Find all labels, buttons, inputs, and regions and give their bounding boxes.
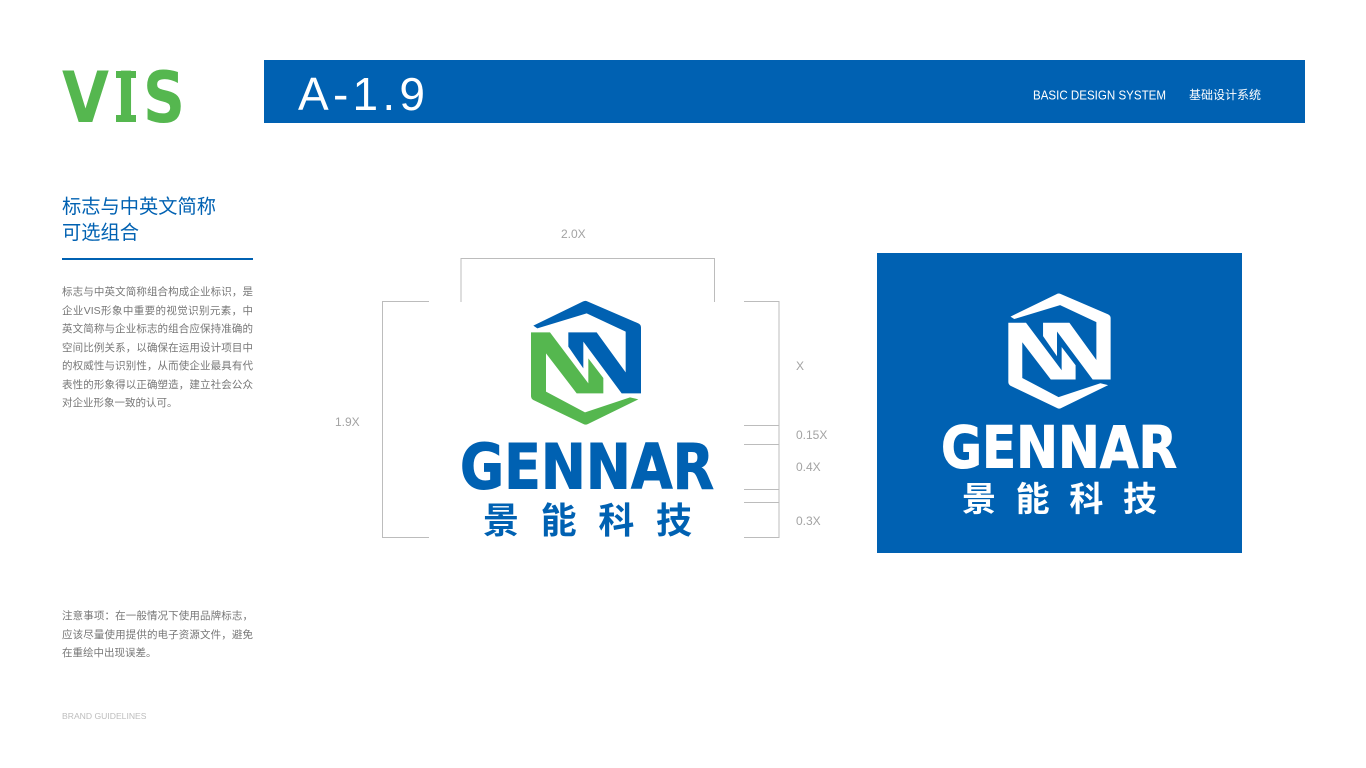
header label Chinese: 基础设计系统 xyxy=(1189,88,1261,102)
header bar xyxy=(264,60,1305,123)
dimension label 0.4X: 0.4X xyxy=(796,460,821,474)
white logo mark xyxy=(1008,294,1111,409)
description text: 表性的形象得以正确塑造，建立社会公众 xyxy=(62,378,253,390)
note text: 应该尽量使用提供的电子资源文件，避免 xyxy=(62,628,253,640)
description text: 的权威性与识别性，从而使企业最具有代 xyxy=(62,360,253,372)
header label English: BASIC DESIGN SYSTEM xyxy=(1033,88,1166,102)
dimension label X: X xyxy=(796,359,804,373)
description text: 对企业形象一致的认可。 xyxy=(62,397,178,409)
white wordmark: GENNAR xyxy=(941,414,1177,482)
dimension label 1.9X: 1.9X xyxy=(335,415,360,429)
white Chinese name: 景能科技 xyxy=(962,472,1157,521)
note text: 在重绘中出现误差。 xyxy=(62,647,156,659)
description text: 空间比例关系，以确保在运用设计项目中 xyxy=(62,342,253,354)
description text: 英文简称与企业标志的组合应保持准确的 xyxy=(62,323,253,335)
panel heading: 标志与中英文简称 xyxy=(62,197,216,218)
VIS title xyxy=(62,57,185,139)
wordmark: GENNAR xyxy=(460,430,714,504)
VIS title: S xyxy=(143,57,185,139)
description text: 标志与中英文简称组合构成企业标识，是 xyxy=(62,286,253,298)
reversed logo panel xyxy=(877,253,1242,553)
footer label: BRAND GUIDELINES xyxy=(62,711,147,721)
dimension label 0.3X: 0.3X xyxy=(796,514,821,528)
Chinese name: 景能科技 xyxy=(483,492,692,544)
panel heading: 可选组合 xyxy=(62,223,139,244)
note text xyxy=(62,610,253,659)
dimension label 0.15X: 0.15X xyxy=(796,428,827,442)
logo mark xyxy=(531,301,641,425)
heading rule xyxy=(62,258,253,260)
note text: 注意事项：在一般情况下使用品牌标志， xyxy=(62,610,253,622)
dimension label 2.0X: 2.0X xyxy=(561,227,586,241)
description text xyxy=(62,286,253,409)
VIS title: I xyxy=(116,57,136,139)
description text: 企业VIS形象中重要的视觉识别元素，中 xyxy=(62,304,253,316)
VIS title: V xyxy=(62,57,109,139)
section number: A-1.9 xyxy=(298,68,425,120)
panel heading xyxy=(62,196,216,244)
